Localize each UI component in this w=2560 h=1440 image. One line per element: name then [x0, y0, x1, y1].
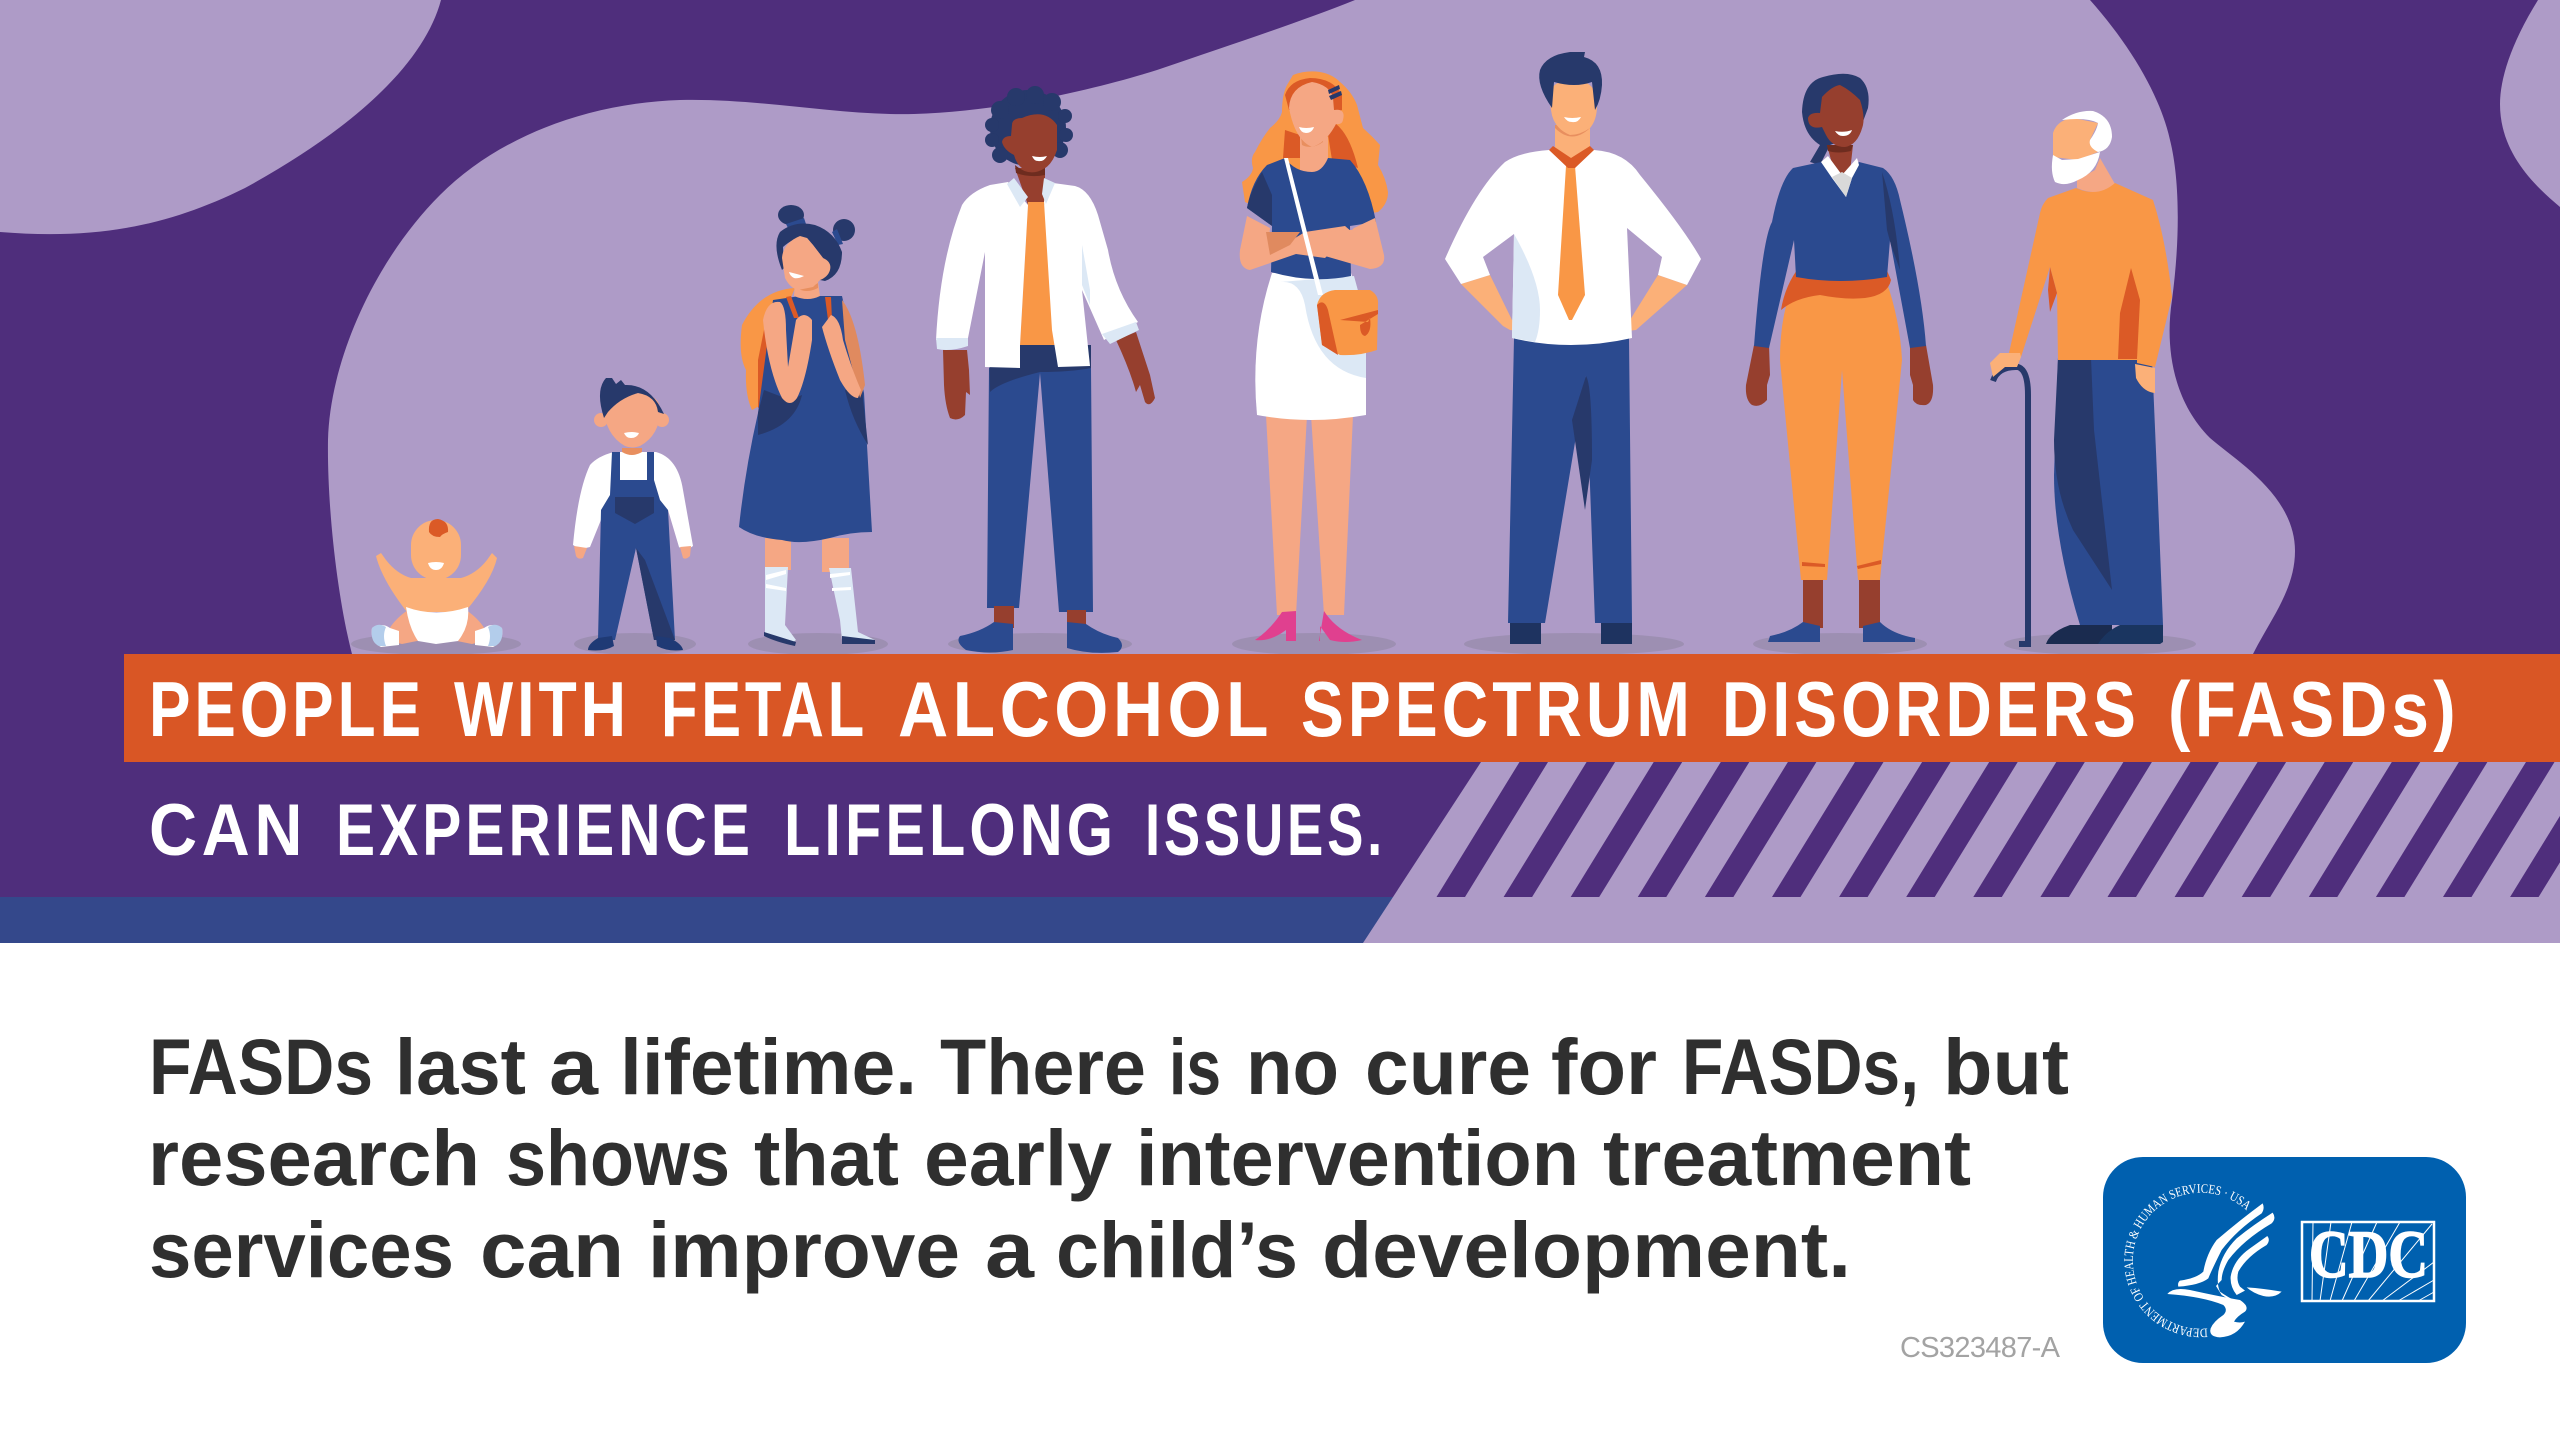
background: lavender striped band — [1363, 762, 2560, 943]
body text block: shows — [506, 1113, 730, 1202]
body text block — [148, 1022, 2069, 1294]
girl: hair — [776, 224, 842, 281]
woman: face — [1289, 82, 1344, 147]
body text block: is — [1169, 1022, 1221, 1111]
woman 2: orange trousers — [1780, 280, 1902, 580]
subtitle: CAN — [149, 790, 307, 871]
body text block: FASDs, — [1682, 1022, 1919, 1111]
woman 2: face — [1808, 85, 1864, 147]
body text block: treatment — [1603, 1113, 1971, 1202]
man: white shirt — [1445, 150, 1701, 345]
banner: orange title bar — [124, 654, 2560, 762]
woman 2: collar — [1821, 156, 1859, 197]
teen: afro hair — [985, 86, 1073, 166]
woman: orange bag — [1317, 290, 1378, 355]
background: blue strip — [0, 897, 1400, 943]
diagonal stripes — [1436, 762, 2560, 897]
woman: crossed arms — [1240, 216, 1352, 270]
body text block: There — [940, 1022, 1146, 1111]
CDC box: CDC — [2309, 1216, 2428, 1292]
HHS eagle profiles mark — [2167, 1203, 2282, 1337]
body text block: last — [395, 1022, 526, 1111]
body text block: for — [1551, 1022, 1657, 1111]
figure: man with tie — [1445, 52, 1701, 655]
figure: teen with white jacket — [936, 86, 1155, 655]
body text block: development. — [1322, 1205, 1851, 1294]
HHS seal ring text: DEPARTMENT OF HEALTH & HUMAN SERVICES · USA — [2124, 1184, 2250, 1338]
man: head — [1549, 80, 1597, 135]
body text block: but — [1943, 1022, 2069, 1111]
woman: long hair — [1242, 71, 1388, 225]
old man: cane — [1993, 367, 2031, 644]
old man: shoes — [2046, 625, 2112, 644]
background: purple banner — [0, 0, 2560, 943]
woman 2: neck — [1827, 145, 1853, 175]
figure: red-haired woman with bag — [1232, 71, 1396, 655]
figure: toddler boy — [573, 378, 696, 655]
body text block: research — [148, 1113, 480, 1202]
background: central lavender blob behind people — [328, 0, 2295, 654]
figure: girl with backpack — [739, 205, 888, 655]
body text block: intervention — [1136, 1113, 1579, 1202]
subtitle: LIFELONG — [784, 790, 1117, 871]
subtitle: EXPERIENCE — [336, 790, 754, 871]
woman 2: hair — [1802, 74, 1869, 165]
man: neck — [1555, 125, 1590, 162]
body text block: no — [1246, 1022, 1339, 1111]
body text block: child’s — [1056, 1205, 1298, 1294]
girl: face — [782, 236, 830, 290]
body text block: lifetime. — [620, 1022, 917, 1111]
man: forearms and hands — [1461, 275, 1687, 332]
old man: neck — [2077, 158, 2115, 192]
body text block: FASDs — [149, 1022, 373, 1111]
title text: (FASDs) — [2168, 665, 2460, 753]
body text block: can — [480, 1205, 624, 1294]
woman: legs and heels — [1266, 415, 1353, 615]
title text — [149, 665, 2460, 753]
teen: arms and hands — [943, 332, 1155, 419]
body text block: early — [924, 1113, 1112, 1202]
woman 2: navy sweater — [1754, 162, 1926, 348]
title text: FETAL — [661, 665, 868, 753]
background: top-right lavender blob — [2500, 0, 2560, 207]
background: top-left lavender blob — [0, 0, 441, 234]
teen: white jacket — [936, 182, 1138, 368]
body text block: a — [549, 1022, 599, 1111]
title text: WITH — [454, 665, 630, 753]
CDC HHS logo badge — [2103, 1157, 2466, 1363]
title text: SPECTRUM — [1301, 665, 1694, 753]
figure: baby — [351, 519, 521, 655]
body text block: that — [754, 1113, 899, 1202]
title text: PEOPLE — [149, 665, 425, 753]
publication code: CS323487-A — [1900, 1332, 2061, 1364]
teen: neck and orange shirt — [1015, 168, 1045, 205]
woman 2: ankles and shoes — [1803, 572, 1880, 628]
woman 2: hands — [1746, 345, 1933, 406]
man: trousers — [1508, 338, 1632, 623]
teen: trousers — [987, 368, 1093, 612]
girl: hair buns — [778, 205, 855, 245]
old man: hands — [1990, 353, 2155, 393]
woman: skirt — [1255, 273, 1366, 420]
old man: trousers — [2054, 358, 2163, 625]
subtitle — [149, 790, 1386, 871]
subtitle: ISSUES. — [1145, 790, 1386, 871]
figure: woman with dark hair and orange trousers — [1746, 74, 1933, 655]
title text: ALCOHOL — [898, 665, 1273, 753]
body text block: improve — [648, 1205, 960, 1294]
old man: sweater — [2009, 183, 2172, 367]
body text block: a — [985, 1205, 1035, 1294]
man: tie — [1558, 166, 1585, 320]
woman: blue top — [1247, 158, 1376, 279]
figure: elderly man with cane — [1990, 111, 2196, 655]
body text block: cure — [1365, 1022, 1531, 1111]
woman: neck — [1300, 137, 1328, 175]
woman: shoulder strap — [1284, 158, 1323, 295]
body text block: services — [149, 1205, 454, 1294]
title text: DISORDERS — [1722, 665, 2140, 753]
old man: head — [2053, 118, 2098, 160]
